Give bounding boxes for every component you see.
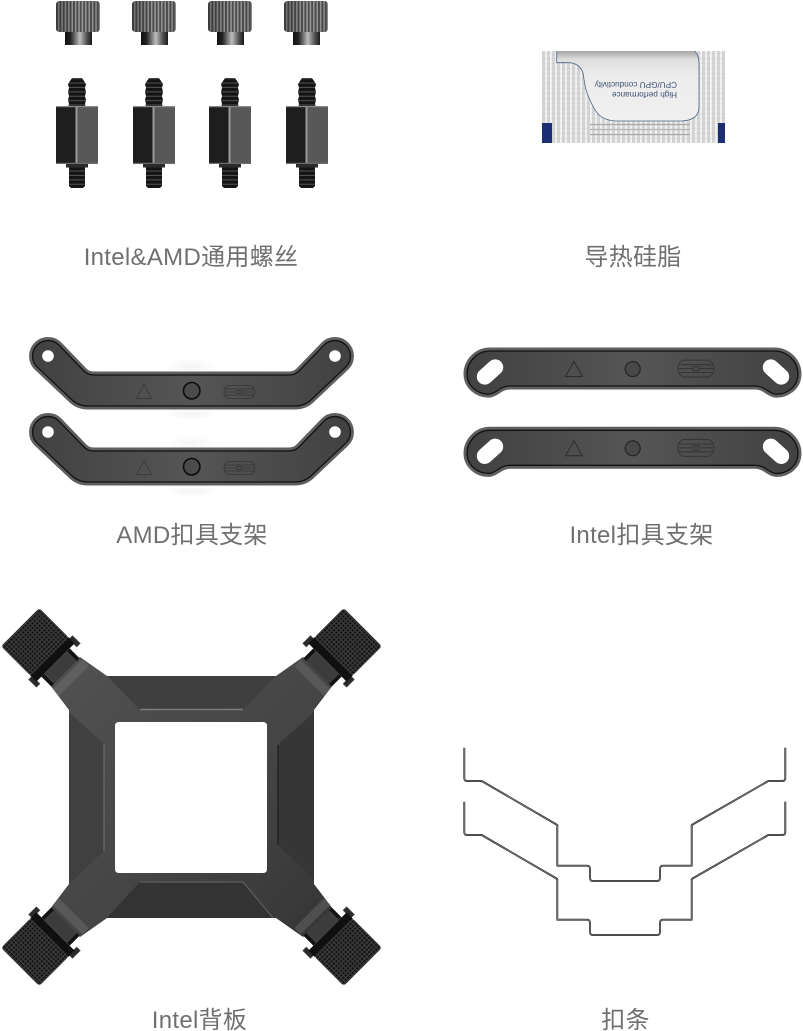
icon: top-left knob <box>0 605 96 703</box>
panel: AMD brackets <box>33 341 350 549</box>
panel: retention clips <box>464 748 785 1031</box>
panel: Intel brackets <box>467 351 798 549</box>
panel: thermal paste <box>542 51 725 271</box>
label: AMD brackets: AMD扣具支架 <box>116 522 268 549</box>
icon: thermal paste packet: High performance <box>611 90 677 99</box>
icon: wire clip bottom <box>464 802 785 935</box>
icon: backplate frame <box>50 657 333 937</box>
icon: bottom-left knob <box>0 891 96 989</box>
label: screws: Intel&AMD通用螺丝 <box>84 244 298 271</box>
icon: standoff screws row <box>56 78 328 188</box>
panel: Intel backplate <box>0 605 385 1031</box>
icon: top-right knob <box>287 605 385 703</box>
icon: wire clip top <box>464 748 785 881</box>
icon: thermal paste packet: CPU/GPU conductivity <box>594 80 677 89</box>
icon: thumb nuts row <box>56 1 328 45</box>
icon: bottom-right knob <box>287 891 385 989</box>
icon: AMD bracket bottom <box>33 417 350 482</box>
label: Intel brackets: Intel扣具支架 <box>569 522 714 549</box>
icon: Intel bracket bottom <box>467 430 798 473</box>
label: thermal paste: 导热硅脂 <box>584 244 682 271</box>
icon: thermal paste packet <box>542 51 725 143</box>
panel: screws <box>56 1 328 271</box>
icon: Intel bracket top <box>467 351 798 394</box>
icon: AMD bracket top <box>33 341 350 406</box>
